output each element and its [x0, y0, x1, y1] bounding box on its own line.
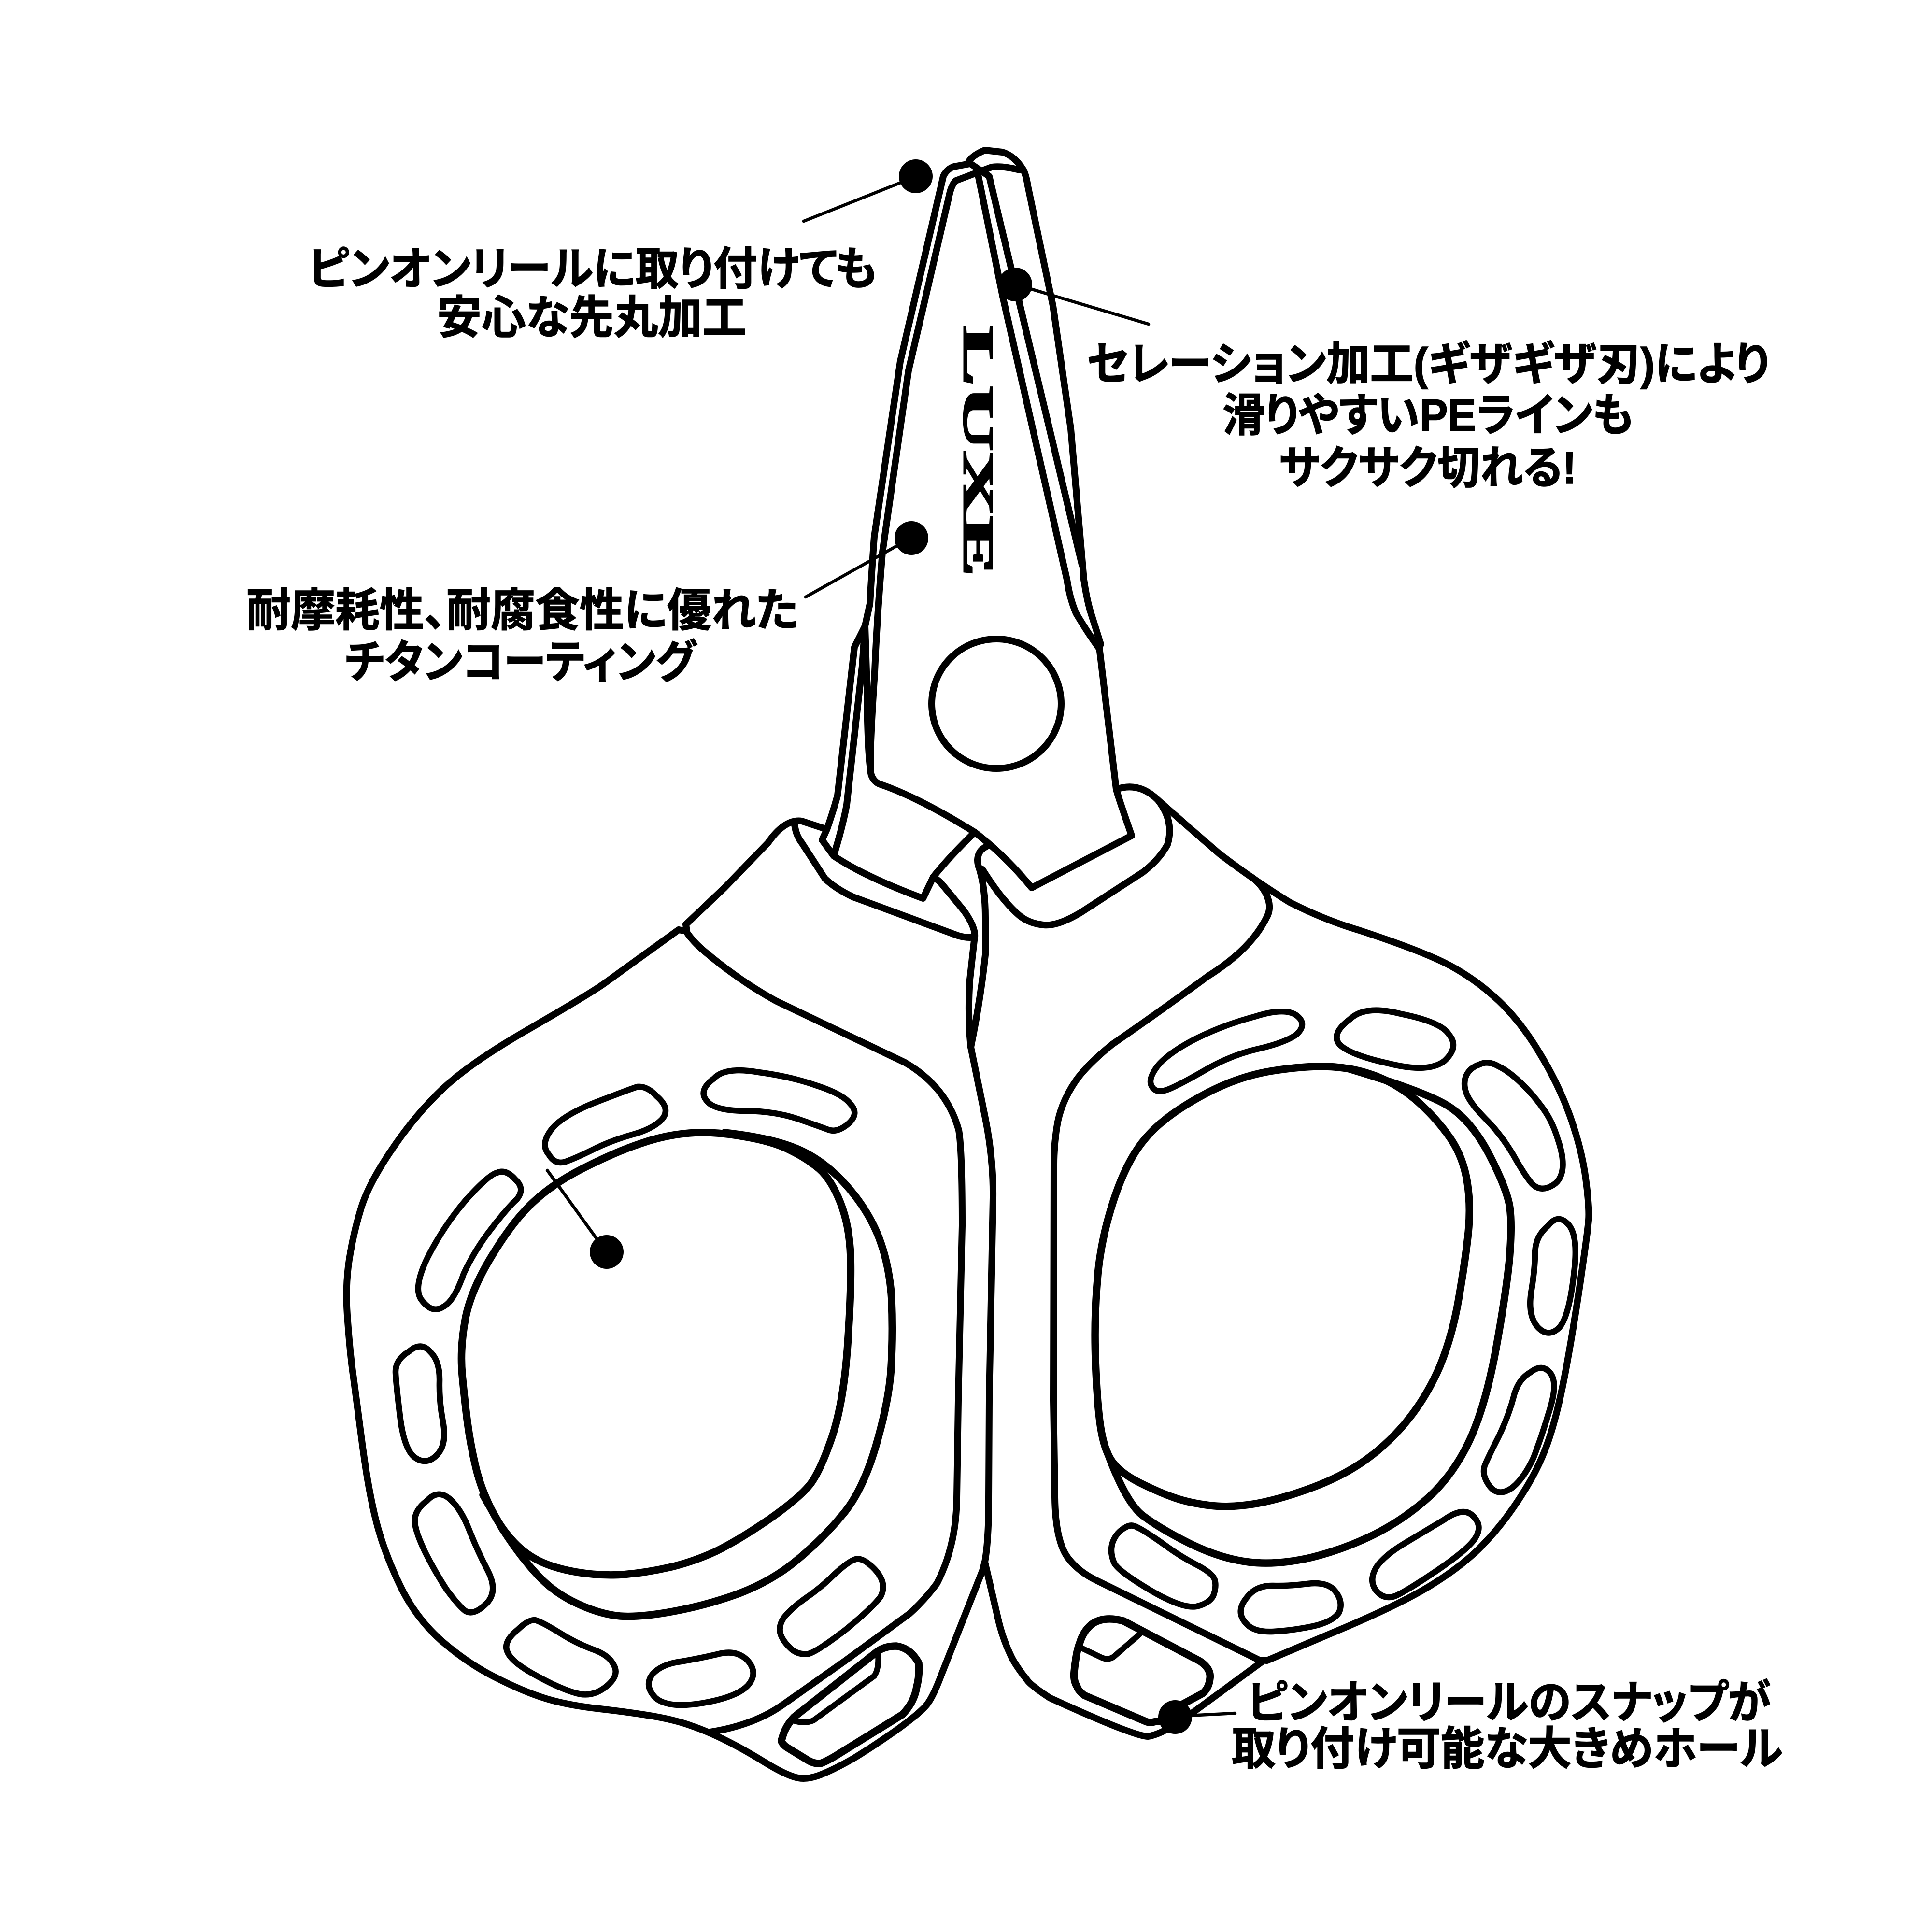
callout text: ピンオンリールに取り付けても	[308, 243, 877, 294]
callout text: 取り付け可能な大きめホール	[1232, 1723, 1783, 1774]
leader line	[804, 180, 908, 221]
callout text	[246, 585, 798, 687]
callout text	[308, 243, 877, 343]
right handle outline	[982, 787, 1589, 1736]
callout: rounded tip	[308, 159, 933, 343]
callout text	[1232, 1677, 1783, 1774]
leader line	[1179, 1713, 1235, 1716]
left handle outline	[347, 821, 993, 1778]
callout text	[1087, 339, 1770, 493]
callout text: 安心な先丸加工	[437, 292, 747, 343]
callout text: 滑りやすいPEラインも	[1222, 390, 1634, 440]
marker dot	[590, 1235, 624, 1269]
left lanyard hole	[781, 1646, 919, 1763]
callout text: サクサク切れる!	[1279, 442, 1577, 493]
callout text: 耐摩耗性、耐腐食性に優れた	[246, 585, 798, 636]
blade	[822, 150, 1132, 898]
LUXE logo: LUXE	[955, 326, 1002, 577]
callout: snap hole	[1158, 1677, 1783, 1774]
left finger hole	[461, 1133, 892, 1617]
callout text: チタンコーティング	[345, 637, 697, 687]
callout: titanium coating	[246, 521, 928, 687]
callout: serration	[998, 268, 1770, 493]
right lanyard hole	[1074, 1619, 1210, 1722]
scissors illustration	[347, 150, 1589, 1778]
callout text: ピンオンリールのスナップが	[1247, 1677, 1771, 1728]
marker dot	[895, 521, 928, 555]
left handle slots	[396, 1070, 883, 1705]
right handle slots	[1111, 1010, 1576, 1632]
marker dot	[1158, 1700, 1192, 1734]
marker dot	[899, 159, 933, 193]
leader line	[547, 1170, 604, 1249]
callout text: セレーション加工(ギザギザ刃)により	[1087, 339, 1770, 389]
leader line	[1019, 285, 1149, 324]
leader line	[806, 541, 906, 597]
marker dot	[998, 268, 1032, 301]
blade pivot circle	[932, 639, 1061, 768]
callout: finger hole marker	[547, 1170, 624, 1269]
right finger hole	[1095, 1066, 1511, 1563]
